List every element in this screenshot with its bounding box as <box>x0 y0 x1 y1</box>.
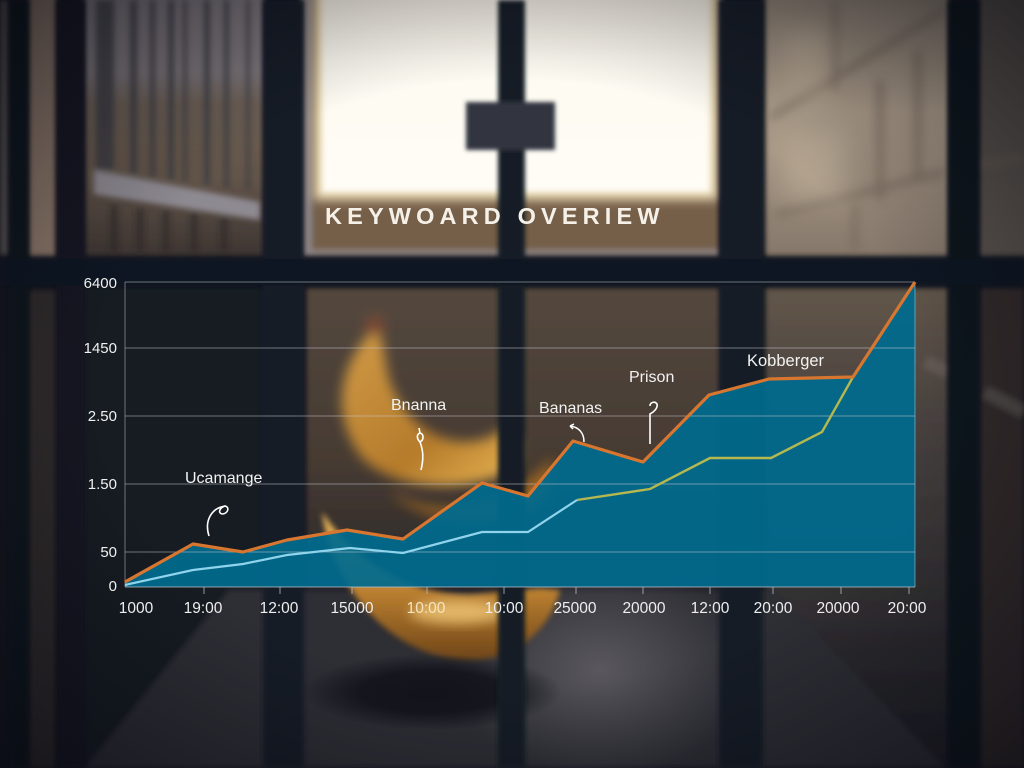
y axis labels: 50 <box>100 544 117 561</box>
title: KEYWOARD OVERIEW <box>325 203 663 229</box>
chart area fill <box>125 282 915 587</box>
x axis and ticks <box>125 587 915 594</box>
annotation: Bnanna: Bnanna <box>391 397 446 414</box>
x axis labels: 12:00 <box>260 600 299 617</box>
x axis labels: 20000 <box>622 600 666 617</box>
x axis labels <box>119 600 927 617</box>
banana shadow <box>302 654 562 730</box>
y axis labels: 1.50 <box>88 476 117 493</box>
annotation: Ucamange: Ucamange <box>185 470 262 487</box>
y axis labels: 0 <box>109 578 117 595</box>
y axis labels: 6400 <box>84 275 117 292</box>
annotation: Prison: Prison <box>629 369 674 386</box>
secondary line: yellow-green segment <box>577 377 853 500</box>
lower walls and floor <box>29 288 1024 768</box>
y axis labels: 2.50 <box>88 408 117 425</box>
y axis labels <box>84 275 117 595</box>
annotation: Kobberger: Kobberger <box>747 352 825 370</box>
x axis labels: 25000 <box>553 600 597 617</box>
upper walls and window <box>0 0 1024 256</box>
line and area chart <box>84 275 927 617</box>
annotation: Prison <box>629 369 674 444</box>
annotation: Bananas <box>539 400 602 442</box>
y axis labels: 1450 <box>84 340 117 357</box>
floor light pool <box>450 560 750 768</box>
left wall vertical stripes and shelf <box>94 0 260 253</box>
lower banana <box>322 512 560 660</box>
x axis labels: 1000 <box>119 600 154 617</box>
x axis labels: 10:00 <box>407 600 446 617</box>
x axis labels: 19:00 <box>184 600 223 617</box>
grid lines <box>125 282 915 587</box>
annotation: Bananas: Bananas <box>539 400 602 417</box>
window glow <box>314 0 718 200</box>
right wall brick lines <box>770 0 1024 250</box>
bright window <box>322 0 710 192</box>
x axis labels: 20:00 <box>754 600 793 617</box>
x axis labels: 12:00 <box>691 600 730 617</box>
x axis labels: 15000 <box>330 600 374 617</box>
annotation: Bnanna <box>391 397 446 470</box>
primary line: orange <box>125 282 915 582</box>
x axis labels: 20000 <box>816 600 860 617</box>
right wall highlight blocks <box>785 30 845 200</box>
x axis labels: 20:00 <box>888 600 927 617</box>
secondary line: light blue segment <box>125 500 577 585</box>
banana highlight <box>410 600 506 624</box>
annotation: Ucamange <box>185 470 262 536</box>
upper bananas <box>342 315 553 520</box>
x axis labels: 10:00 <box>485 600 524 617</box>
